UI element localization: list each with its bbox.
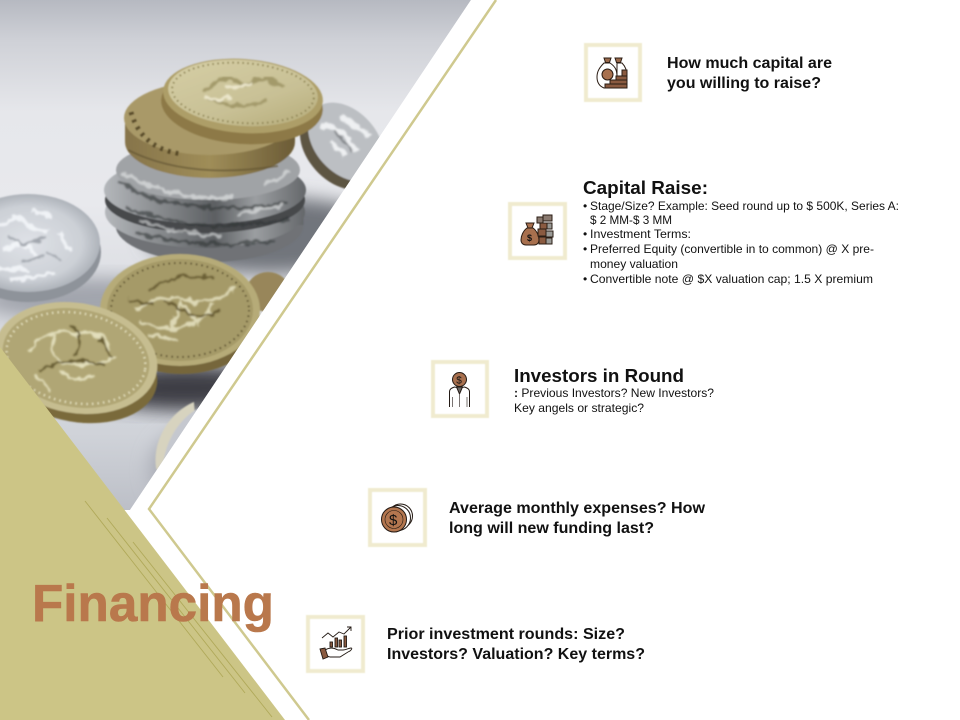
- silver stack: [116, 228, 260, 262]
- top gold coin: [160, 93, 324, 145]
- icon: investor with coin head: [450, 372, 470, 407]
- icon frame: capital bags: [586, 45, 640, 100]
- icon: bag with stacks: [521, 215, 553, 245]
- icon: money bags and coin stacks: [597, 58, 627, 88]
- icon frame: capital raise: $: [527, 233, 532, 243]
- icon: dollar coins: [382, 504, 412, 532]
- icon frame: investors: $: [456, 376, 462, 386]
- bullet list: Stage/Size? Example: Seed round up to $ 500K, Series A:: [590, 199, 899, 213]
- title: Financing: [32, 574, 274, 632]
- front gold coin: [44, 374, 158, 424]
- text: capital question: [667, 55, 832, 92]
- text block: capital raise: [583, 178, 899, 286]
- icon frame: capital raise: [510, 204, 565, 258]
- text: prior rounds question: [387, 626, 645, 663]
- bullet list: •: [583, 242, 587, 256]
- photo: stacked gold and silver coins: [0, 0, 480, 510]
- olive triangle: [0, 347, 285, 720]
- icon frame: coins: [370, 490, 425, 545]
- left silver coin: [0, 244, 102, 302]
- bullet list: [583, 199, 899, 286]
- icon frame: growth chart on hand: [308, 617, 363, 671]
- heading: investors in round: Investors in Round: [514, 365, 684, 386]
- middle gold coin: [156, 316, 260, 374]
- text: prior rounds question: Investors? Valuation? Key terms?: [387, 646, 645, 663]
- thin decorative lines: [85, 501, 272, 717]
- body text: [514, 386, 714, 415]
- small coin at right of middle coin: [248, 271, 285, 312]
- text block: investors in round: [514, 365, 714, 415]
- body text: Key angels or strategic?: [514, 401, 644, 415]
- bullet list: money valuation: [590, 257, 678, 271]
- bullet list: •: [583, 272, 587, 286]
- pale coin at bottom: [155, 402, 196, 470]
- icon frame: coins: $: [389, 512, 398, 529]
- bullet list: Convertible note @ $X valuation cap; 1.5 X premium: [590, 272, 873, 286]
- bullet list: •: [583, 227, 587, 241]
- icon frame: investors: [433, 362, 487, 416]
- text: expenses question: [449, 500, 706, 537]
- bullet list: Investment Terms:: [590, 227, 691, 241]
- text: expenses question: Average monthly expenses? How: [449, 500, 706, 517]
- bullet list: Preferred Equity (convertible in to common) @ X pre-: [590, 242, 874, 256]
- far right silver coin: [299, 130, 351, 190]
- text: prior rounds question: Prior investment rounds: Size?: [387, 626, 625, 643]
- second gold coin: [124, 140, 296, 179]
- icon: hand holding chart: [320, 627, 352, 659]
- text: capital question: you willing to raise?: [667, 75, 821, 92]
- bullet list: $ 2 MM-$ 3 MM: [590, 213, 672, 227]
- bullet list: •: [583, 199, 587, 213]
- text: capital question: How much capital are: [667, 55, 832, 72]
- heading: capital raise: Capital Raise:: [583, 178, 708, 199]
- body text: : Previous Investors? New Investors?: [514, 386, 714, 400]
- gold chevron line: [149, 0, 496, 720]
- text: expenses question: long will new funding last?: [449, 520, 654, 537]
